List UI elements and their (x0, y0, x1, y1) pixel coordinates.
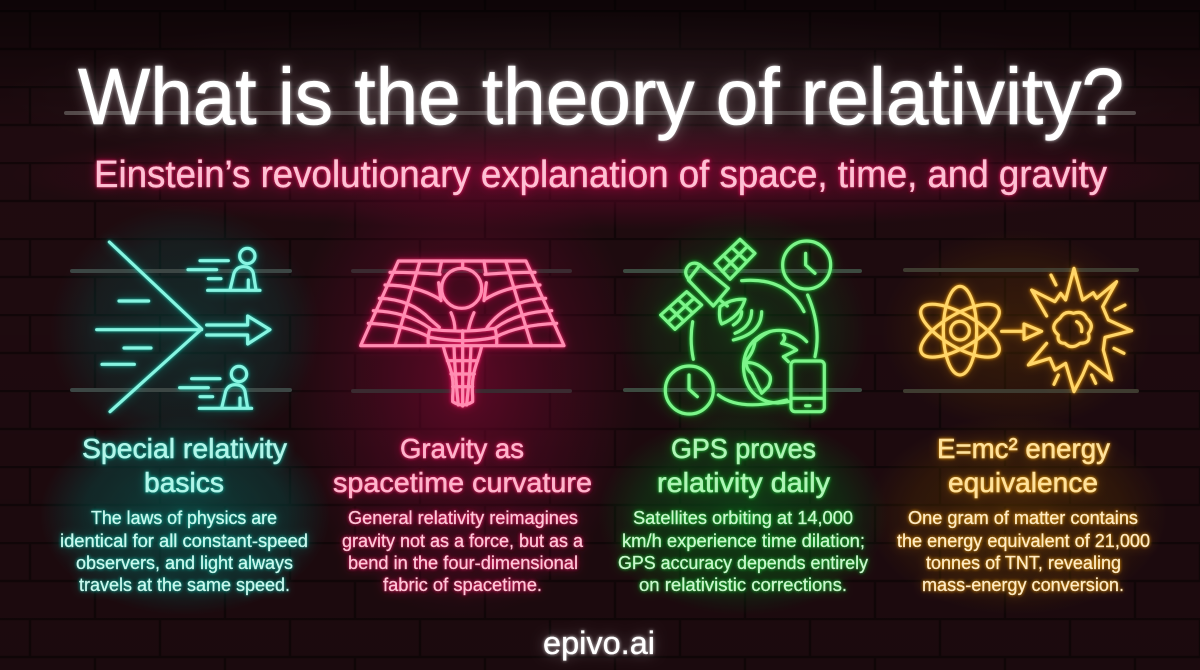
cloud (1054, 312, 1091, 347)
satellite (661, 239, 755, 329)
body: on relativistic corrections. (639, 575, 847, 595)
grid lines (395, 261, 532, 346)
heading: equivalence (948, 467, 1098, 498)
heading: basics (144, 467, 224, 498)
body: travels at the same speed. (79, 575, 290, 595)
heading: spacetime curvature (333, 467, 592, 498)
mounting rails (66, 113, 1137, 391)
heading (82, 433, 287, 498)
body (60, 508, 308, 595)
subtitle: Einstein’s revolutionary explanation of space, time, and gravity (94, 154, 1107, 196)
body: mass-energy conversion. (922, 575, 1124, 595)
body: fabric of spacetime. (383, 575, 542, 595)
body: bend in the four-dimensional (348, 553, 578, 573)
rays (1051, 275, 1125, 384)
icon: GPS satellite, earth, clocks, phone (661, 239, 831, 414)
orbit arcs (691, 280, 817, 405)
body: observers, and light always (76, 553, 293, 573)
title: What is the theory of relativity? (78, 52, 1124, 141)
column 4: energy text (897, 433, 1150, 595)
clock bottom (665, 366, 713, 414)
arrow (207, 316, 270, 344)
observer top (188, 248, 260, 290)
speed dashes (102, 301, 151, 364)
signal waves (733, 311, 762, 340)
grid outline (361, 261, 564, 346)
body: Satellites orbiting at 14,000 (633, 508, 853, 528)
heading (657, 433, 830, 498)
observer bottom (180, 366, 252, 408)
heading: Gravity as (400, 433, 524, 464)
icon: spacetime curvature grid (361, 261, 564, 406)
column 2: gravity text (333, 433, 592, 595)
icon: atom to explosion (913, 268, 1132, 392)
icon: special relativity observers and light (97, 242, 270, 412)
footer brand: epivo.ai (543, 625, 655, 661)
heading (333, 433, 592, 498)
body: GPS accuracy depends entirely (618, 553, 868, 573)
body: tonnes of TNT, revealing (926, 553, 1121, 573)
body: identical for all constant-speed (60, 531, 308, 551)
column 3: GPS text (618, 433, 868, 595)
heading: Special relativity (82, 433, 287, 464)
funnel (443, 346, 482, 406)
body: the energy equivalent of 21,000 (897, 531, 1150, 551)
heading: relativity daily (657, 467, 830, 498)
column 1: special relativity text (60, 433, 308, 595)
body: One gram of matter contains (908, 508, 1138, 528)
explosion star (1028, 268, 1132, 392)
clock top (783, 241, 831, 289)
heading: E=mc² energy (937, 433, 1110, 464)
body: The laws of physics are (91, 508, 277, 528)
arrow (1002, 324, 1042, 339)
massive sphere (442, 268, 482, 308)
converging light chevron (97, 242, 202, 412)
body: gravity not as a force, but as a (342, 531, 584, 551)
body (342, 508, 584, 595)
body (618, 508, 868, 595)
earth (744, 330, 807, 403)
body: km/h experience time dilation; (622, 531, 865, 551)
body: General relativity reimagines (348, 508, 578, 528)
phone (791, 361, 824, 412)
atom (913, 286, 1007, 375)
heading: GPS proves (671, 433, 816, 464)
body (897, 508, 1150, 595)
heading (937, 433, 1110, 498)
